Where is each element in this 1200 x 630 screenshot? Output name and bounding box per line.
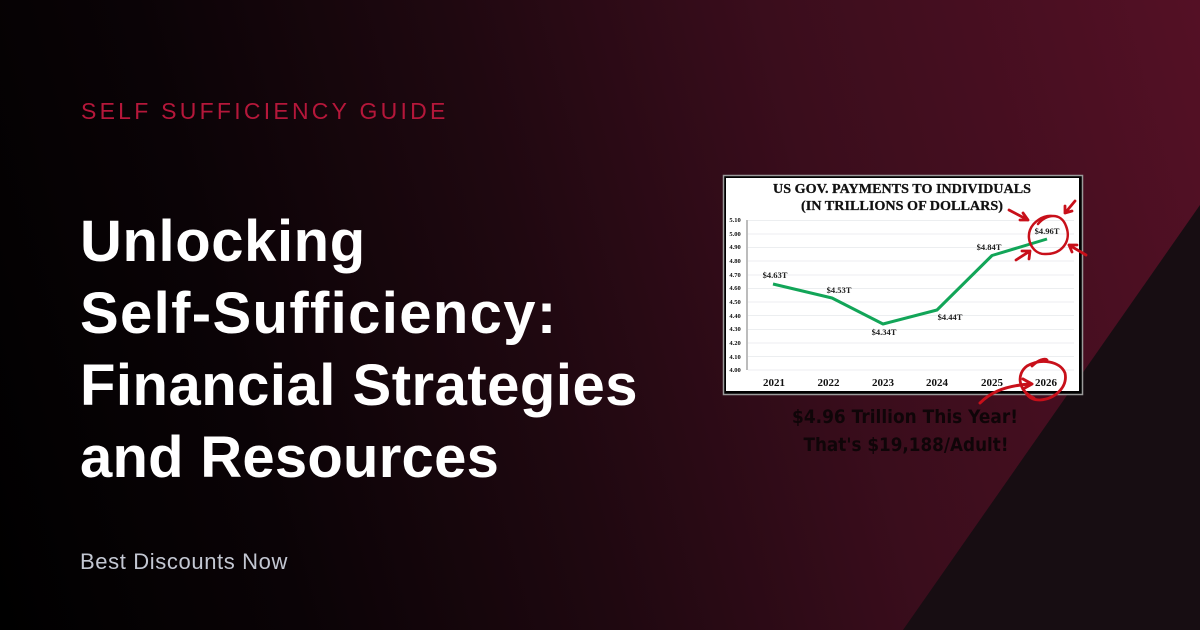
x axis labels: 2024: [926, 377, 948, 389]
handwritten caption: $4.96 Trillion This Year!: [792, 406, 1018, 428]
y axis labels: 4.40: [729, 313, 741, 320]
x axis labels: 2023: [872, 377, 894, 389]
eyebrow label: SELF SUFFICIENCY GUIDE: [81, 98, 449, 124]
data labels: [763, 226, 1060, 337]
y axis labels: 4.20: [729, 340, 741, 347]
chart title: (IN TRILLIONS OF DOLLARS): [801, 199, 1003, 214]
y axis labels: [729, 217, 741, 374]
source line: Best Discounts Now: [80, 549, 288, 574]
data labels: $4.53T: [827, 285, 852, 295]
y axis labels: 4.90: [729, 244, 741, 251]
red annotations: [980, 201, 1086, 403]
green data line: [773, 239, 1047, 324]
y axis labels: 4.70: [729, 272, 741, 279]
x axis labels: 2022: [818, 377, 840, 389]
data labels: $4.84T: [977, 242, 1002, 252]
y axis labels: 4.00: [729, 367, 741, 374]
y axis labels: 4.50: [729, 299, 741, 306]
y axis labels: 4.80: [729, 258, 741, 265]
chart title: [773, 182, 1031, 214]
data labels: $4.44T: [938, 312, 963, 322]
y axis labels: 5.00: [729, 231, 741, 238]
y axis labels: 4.60: [729, 285, 741, 292]
title: [80, 209, 638, 490]
title: Self-Sufficiency:: [80, 281, 558, 346]
title: and Resources: [80, 425, 499, 490]
x axis labels: 2026: [1035, 377, 1058, 389]
title: Unlocking: [80, 209, 366, 274]
data labels: $4.34T: [872, 327, 897, 337]
chart frame: [724, 176, 1082, 394]
data labels: $4.96T: [1035, 226, 1060, 236]
y axis labels: 4.10: [729, 354, 741, 361]
handwritten caption: That's $19,188/Adult!: [804, 434, 1008, 456]
y axis labels: 4.30: [729, 326, 741, 333]
title: Financial Strategies: [80, 353, 638, 418]
x axis labels: 2025: [981, 377, 1004, 389]
y axis labels: 5.10: [729, 217, 741, 224]
chart title: US GOV. PAYMENTS TO INDIVIDUALS: [773, 182, 1031, 197]
x axis labels: [763, 377, 1058, 389]
y axis and grid lines: [747, 220, 1074, 370]
x axis labels: 2021: [763, 377, 785, 389]
handwritten caption: [792, 406, 1018, 456]
data labels: $4.63T: [763, 270, 788, 280]
